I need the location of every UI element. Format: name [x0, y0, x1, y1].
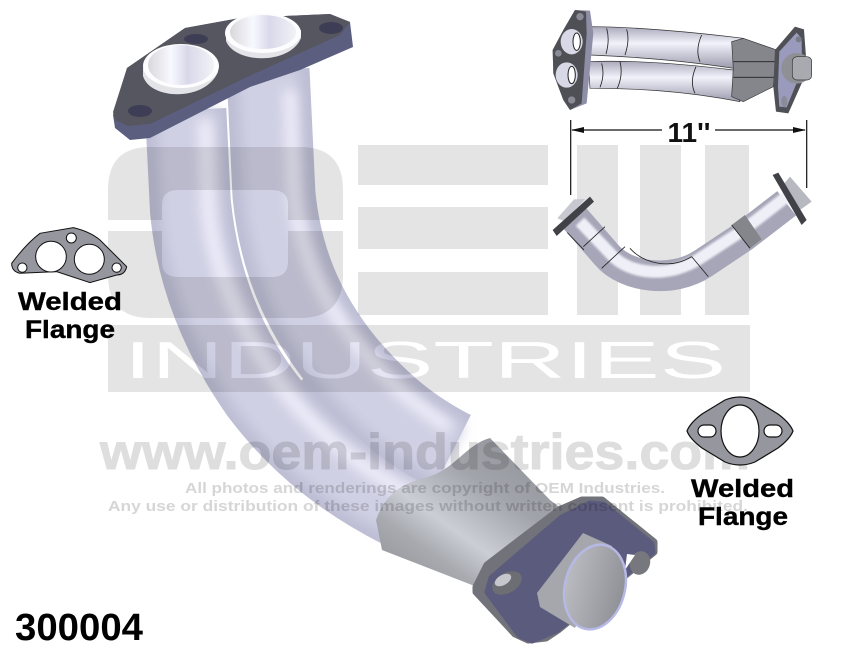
- side right flange: [773, 173, 812, 225]
- cone: [732, 38, 777, 102]
- part number: 300004: [15, 607, 143, 649]
- left label: Welded: [18, 288, 122, 316]
- reducer cone: [376, 438, 590, 590]
- left label: [18, 288, 122, 344]
- dimension 11 inch: [571, 117, 807, 195]
- bottom flange: [476, 500, 654, 640]
- right label: [691, 475, 794, 531]
- top flange: [113, 13, 353, 140]
- side view pipe: [553, 173, 812, 277]
- dimension label: 11'': [668, 117, 710, 148]
- left tube: [187, 110, 430, 520]
- left gasket icon: [12, 228, 127, 283]
- left tube mouth: [143, 44, 219, 94]
- watermark: [99, 145, 750, 515]
- right label: Flange: [698, 503, 788, 531]
- side tube body: [573, 203, 787, 276]
- side reducer band: [732, 215, 762, 248]
- right tube: [268, 70, 452, 452]
- main exhaust pipe rendering: [113, 13, 654, 640]
- right gasket icon: [687, 397, 793, 465]
- left label: Flange: [25, 316, 115, 344]
- right label: Welded: [691, 475, 794, 503]
- watermark URL: www.oem-industries.com: [99, 424, 750, 480]
- watermark word INDUSTRIES: INDUSTRIES: [124, 332, 726, 390]
- right tube mouth: [225, 13, 301, 58]
- upper tube: [590, 27, 743, 68]
- copyright line 1: All photos and renderings are copyright of OEM Industries.: [185, 481, 665, 497]
- right flange: [773, 27, 812, 113]
- lower tube: [588, 61, 740, 102]
- side left flange: [553, 197, 594, 236]
- watermark logo OEM: [108, 145, 750, 392]
- copyright line 2: Any use or distribution of these images without written consent is prohibited.: [108, 499, 748, 515]
- left flange: [553, 10, 593, 110]
- top view pipe: [553, 10, 812, 113]
